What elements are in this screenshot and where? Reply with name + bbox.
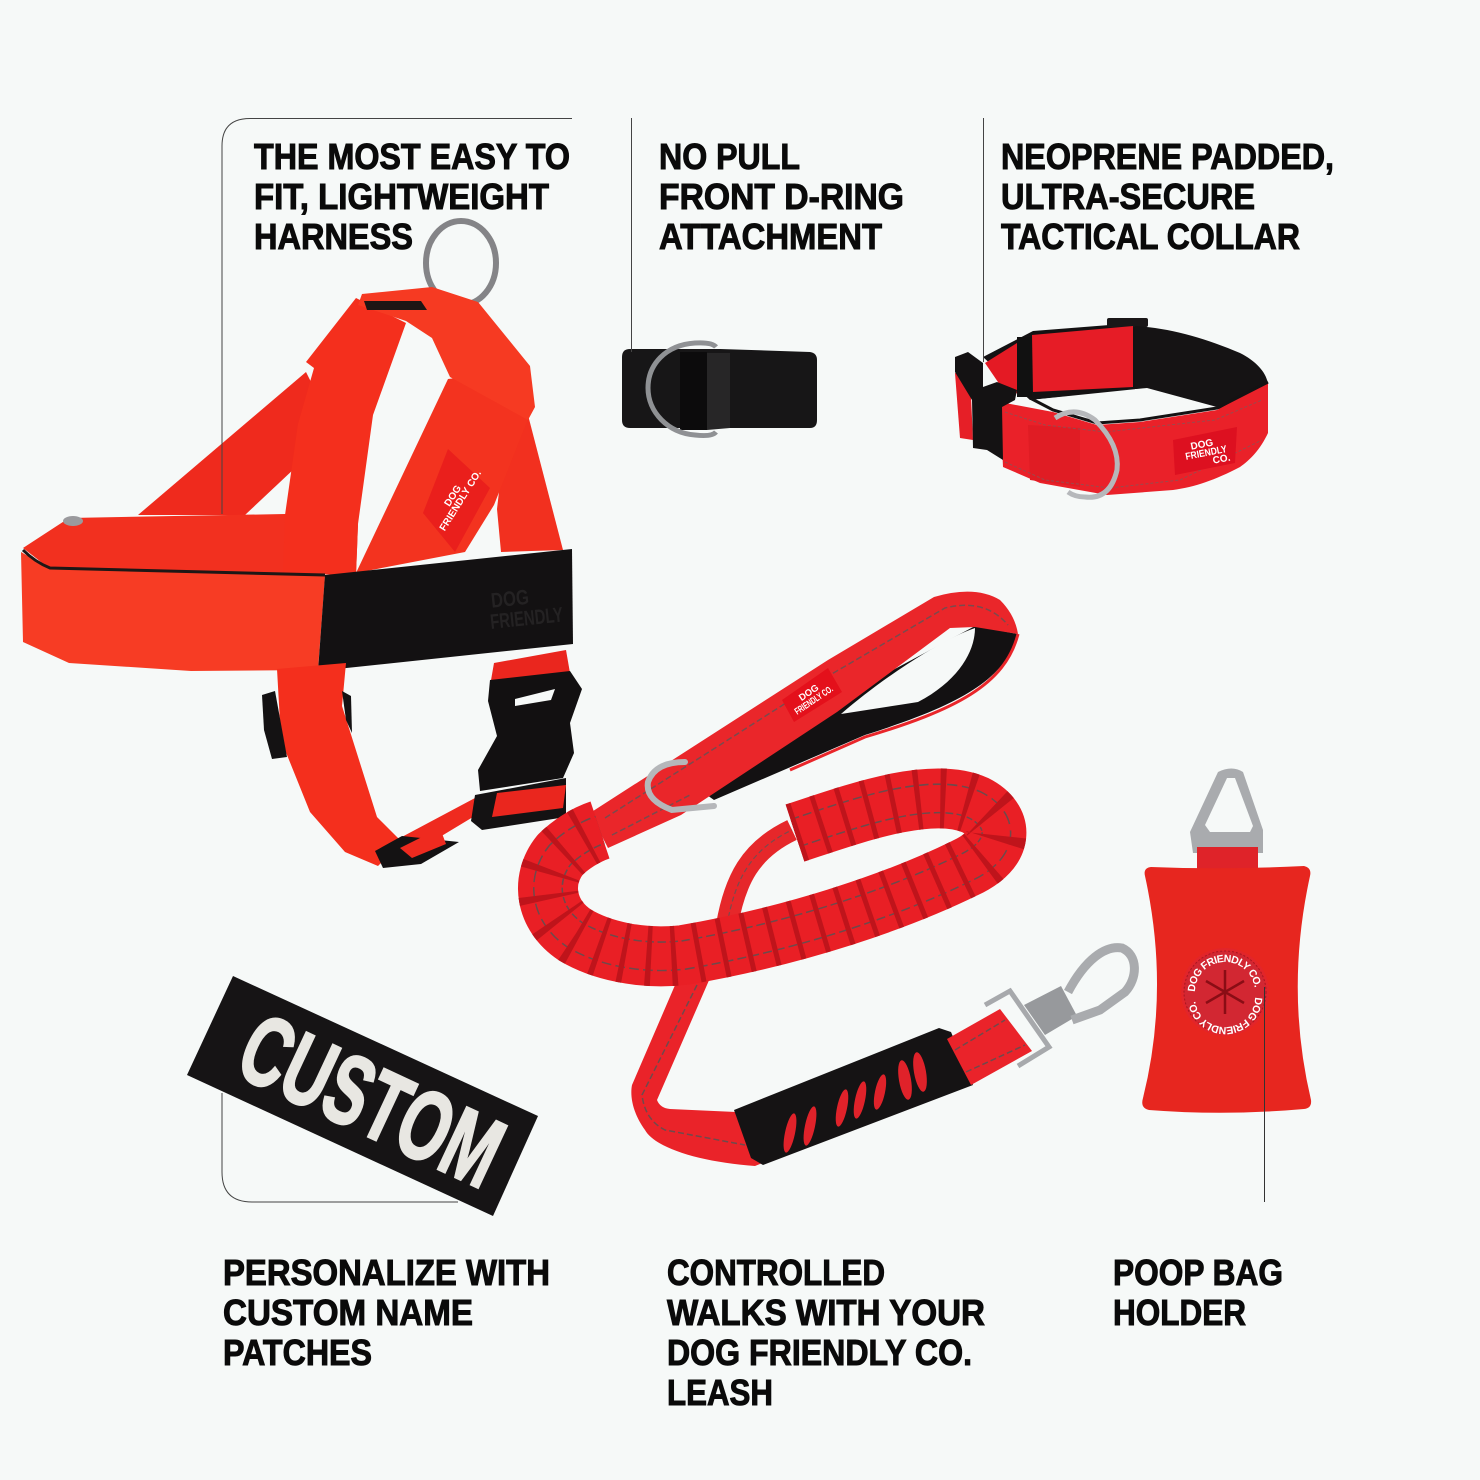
heading: patch: CUSTOM NAME (223, 1292, 473, 1333)
product: harness (21, 221, 582, 868)
harness back strap (138, 372, 330, 515)
harness chest label (423, 449, 490, 552)
heading: leash (667, 1252, 985, 1413)
harness rear chest strap (497, 415, 563, 552)
heading: leash: CONTROLLED (667, 1252, 885, 1293)
heading: front D-ring: FRONT D-RING (659, 176, 904, 217)
harness girth band inner (23, 514, 358, 575)
heading: leash: WALKS WITH YOUR (667, 1292, 985, 1333)
heading: leash: DOG FRIENDLY CO. (667, 1332, 972, 1373)
heading: collar: ULTRA-SECURE (1001, 176, 1255, 217)
collar neoprene lining (1135, 326, 1268, 410)
badge text: DOG FRIENDLY CO. (1188, 954, 1260, 992)
collar left strap end (955, 373, 973, 440)
heading: leash: LEASH (667, 1372, 773, 1413)
leash inner strap (727, 830, 792, 925)
harness D-ring (426, 221, 496, 305)
callout line: front D-ring (630, 118, 632, 352)
harness black panel (318, 549, 573, 671)
harness yoke flap (358, 287, 535, 420)
harness panel logo: FRIENDLY (489, 603, 564, 634)
callout line: harness (222, 118, 572, 514)
leash traffic grip (734, 1028, 973, 1165)
heading: front D-ring: NO PULL (659, 136, 800, 177)
leash end strap (947, 1009, 1032, 1085)
harness girth band front (21, 552, 325, 671)
collar label: DOG (1190, 438, 1214, 453)
collar front band (1000, 382, 1268, 495)
collar opening (1030, 388, 1217, 423)
harness right chest strap (356, 375, 528, 573)
harness panel logo: DOG (490, 586, 530, 613)
harness lower straps (277, 663, 402, 866)
collar buckle (955, 352, 1017, 460)
harness chest label: FRIENDLY CO. (438, 468, 484, 533)
harness chest label: DOG (443, 483, 464, 509)
heading: poop bag holder (1113, 1252, 1283, 1333)
heading: collar (1001, 136, 1334, 257)
product: poop bag holder (1142, 768, 1312, 1113)
collar label: CO. (1212, 453, 1232, 467)
callout line: collar (982, 118, 984, 362)
heading: harness: THE MOST EASY TO (254, 136, 570, 177)
leash handle label (782, 668, 842, 722)
leash handle label: FRIENDLY CO. (793, 684, 835, 717)
leash bungee (548, 798, 996, 956)
leash O-ring (648, 762, 714, 810)
product: custom name patch: CUSTOM (223, 991, 520, 1209)
product: collar (955, 318, 1268, 497)
collar inner red webbing (985, 343, 1020, 395)
heading: front D-ring (659, 136, 904, 257)
collar label (1173, 427, 1237, 475)
holder badge (1181, 948, 1269, 1036)
heading: poop bag holder: HOLDER (1113, 1292, 1246, 1333)
product: custom name patch (187, 976, 538, 1216)
heading: front D-ring: ATTACHMENT (659, 216, 882, 257)
harness panel logo (487, 583, 564, 634)
product: leash (548, 592, 1134, 1166)
heading: harness (254, 136, 570, 257)
leash handle neoprene (700, 626, 1018, 800)
holder strap (1197, 847, 1258, 871)
callout line: holder (1264, 987, 1266, 1202)
collar label: FRIENDLY (1185, 444, 1228, 463)
leash handle (590, 592, 1018, 848)
heading: patch: PATCHES (223, 1332, 372, 1373)
heading: collar: NEOPRENE PADDED, (1001, 136, 1334, 177)
holder pouch (1142, 866, 1311, 1113)
harness left chest strap (283, 298, 406, 575)
heading: harness: FIT, LIGHTWEIGHT (254, 176, 549, 217)
leash clip (985, 948, 1134, 1066)
heading: collar: TACTICAL COLLAR (1001, 216, 1300, 257)
callout line: patch (222, 1093, 458, 1202)
heading: patch (223, 1252, 550, 1373)
holder badge: DOG FRIENDLY CO. (1190, 998, 1262, 1034)
heading: patch: PERSONALIZE WITH (223, 1252, 550, 1293)
leash handle label: DOG (797, 682, 821, 704)
holder carabiner (1190, 768, 1263, 853)
harness buckle (478, 671, 582, 791)
product: front D-ring attachment (622, 343, 817, 436)
harness side slider (262, 691, 287, 759)
heading: poop bag holder: POOP BAG (1113, 1252, 1283, 1293)
leash lower strap (631, 955, 770, 1166)
collar D-ring (1055, 412, 1117, 497)
collar back top edge (983, 323, 1135, 400)
heading: harness: HARNESS (254, 216, 413, 257)
